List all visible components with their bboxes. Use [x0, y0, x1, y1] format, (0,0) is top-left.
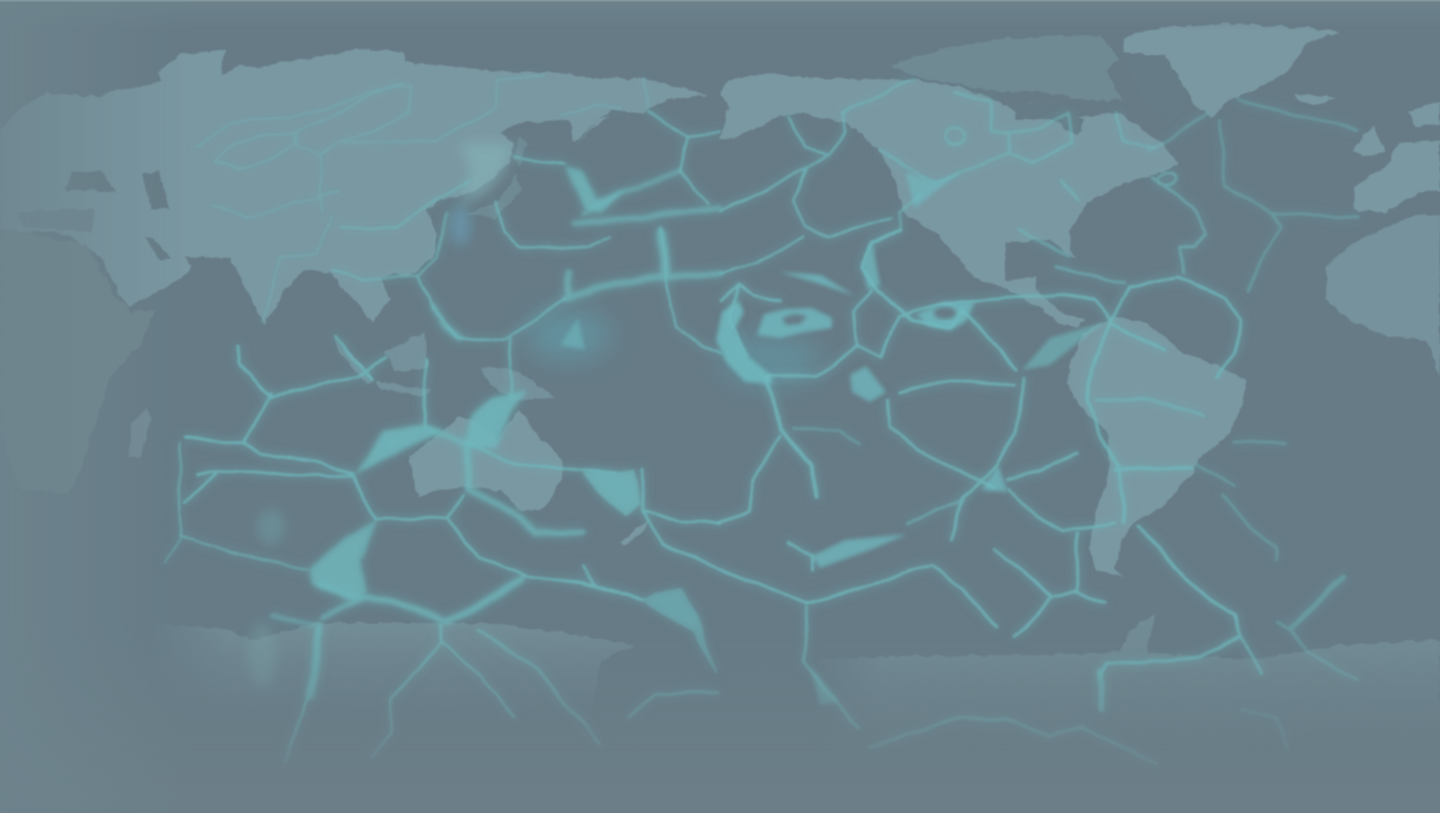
network: Asia faint lines [197, 75, 647, 320]
network: Asia bright lines [331, 180, 470, 280]
network: Tasman blob [583, 470, 640, 515]
land: South America [1069, 317, 1248, 577]
band: east Pacific node [917, 302, 975, 330]
network: East Pacific and spiral lines [720, 230, 1241, 393]
dark seas over land [15, 55, 1188, 304]
land: Eurasia [0, 48, 709, 325]
land: Canadian Arctic islands [890, 35, 1122, 100]
land: Australia [409, 410, 562, 512]
band: south spindle [812, 534, 908, 568]
band: spiral west arc [716, 300, 772, 384]
network: Ridge triangle [643, 588, 716, 673]
land: Borneo and Sumatra [335, 332, 430, 396]
land: Central America [1035, 290, 1085, 328]
fade: top [0, 0, 1440, 30]
network: Southern loop leaf [310, 520, 378, 598]
sea: Caspian [142, 170, 168, 210]
glow: central Pacific [526, 311, 610, 359]
band: Peru [1022, 322, 1105, 370]
land: Kamchatka [575, 115, 610, 145]
eddy hole [934, 307, 956, 319]
network: south west cells [165, 337, 807, 603]
band: Gulf of Alaska [905, 172, 960, 208]
land: Europe right [1354, 100, 1440, 212]
fade: bottom [0, 620, 1440, 813]
sea: Persian Gulf [145, 238, 172, 260]
sea: Hudson Bay [1014, 100, 1083, 136]
glow: Sea of Japan [450, 205, 470, 245]
land: Greenland [1124, 23, 1340, 117]
land: Iceland [1294, 93, 1335, 103]
band: Antarctic centre [810, 665, 838, 705]
network: North America lines [844, 80, 1207, 283]
network: North Pacific thin cells [418, 113, 890, 400]
band: spindle [780, 272, 855, 296]
network: Atlantic faint lines [1147, 100, 1358, 290]
land: Britain [1353, 125, 1386, 156]
glow patches [248, 143, 820, 689]
network: south Pacific cells [720, 380, 1262, 727]
network: Japan leaf [566, 165, 625, 212]
fade: left [0, 0, 190, 813]
network: Antarctic south America band [1099, 672, 1101, 708]
land: New Zealand [618, 520, 650, 545]
land: Africa right [1326, 213, 1440, 377]
sea: Gulf of California [934, 232, 952, 262]
sea: Red Sea [88, 248, 126, 304]
band: eddy east [850, 366, 886, 402]
land: New Guinea [482, 366, 556, 400]
sea: Mediterranean [15, 208, 95, 232]
band: Coast Mexico [862, 240, 880, 290]
land: Antarctica west [186, 622, 633, 667]
network: Antarctic radials [285, 623, 720, 763]
sea: Baffin Bay [1124, 55, 1188, 132]
caustic network [165, 75, 1358, 763]
glow: Antarctic [248, 621, 276, 689]
glow: south Indian [257, 509, 285, 545]
network: Coral Sea leaf [466, 390, 526, 448]
network: south west wide bands [271, 428, 583, 695]
network: far south Atlantic faint lines [1197, 442, 1358, 680]
glow: Yellow Sea [459, 143, 514, 205]
network: Indonesia leaf [356, 425, 442, 474]
land: Antarctica east [854, 614, 1440, 685]
glow: spiral [720, 334, 820, 386]
band: central star [560, 318, 585, 350]
band: eddy loop [757, 308, 832, 338]
network: bottom arcs [871, 710, 1289, 763]
land: Madagascar [129, 408, 151, 457]
land: Japan and Sakhalin [465, 135, 526, 218]
land: North America [720, 73, 1179, 318]
sea: Black Sea [65, 170, 115, 192]
top edge highlight [0, 0, 1440, 2]
thick caustic bands [560, 172, 1105, 705]
band: south junction [982, 465, 1008, 492]
land: Africa left [0, 228, 156, 493]
network: South America lines [1087, 325, 1205, 523]
network: wide northern bands [432, 170, 720, 338]
